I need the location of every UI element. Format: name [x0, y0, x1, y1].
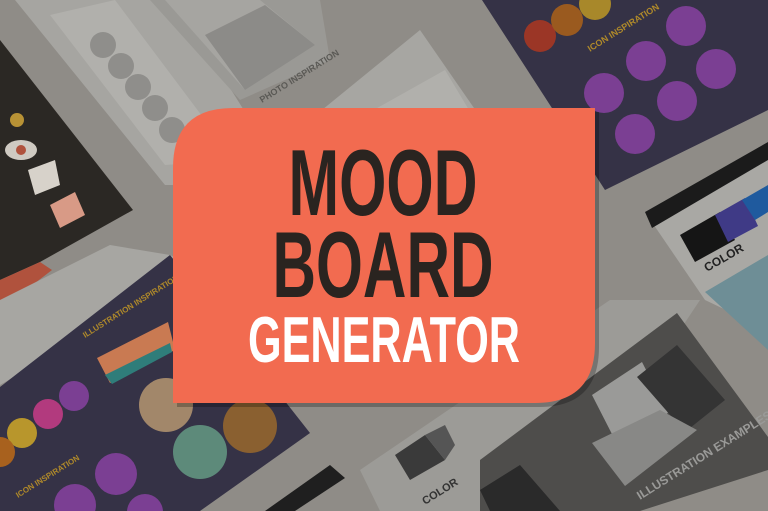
card: color template right: [645, 142, 768, 350]
card: photo placeholder top middle: [150, 0, 330, 100]
title: BOARD: BOARD: [272, 212, 494, 317]
card: navy illustration inspiration bottom-left: ILLUSTRATION INSPIRATION: [81, 273, 181, 340]
card: gray color template bottom-middle: [360, 300, 700, 511]
orange title panel: [173, 108, 599, 407]
card: gray color template bottom-middle: COLOR: [420, 476, 460, 508]
card: illustration examples dark: [480, 313, 768, 511]
card: navy icon inspiration top-right: ICON INSPIRATION: [586, 2, 661, 54]
card: photo inspiration light: PHOTO INSPIRATION: [258, 48, 341, 105]
card: navy icon inspiration top-right: [482, 0, 768, 190]
card: light gray template top-left: [15, 0, 250, 185]
card: navy illustration inspiration bottom-left: ICON INSPIRATION: [14, 453, 81, 500]
card: dark strip bottom: [265, 465, 345, 511]
card: dark illustration left: [0, 40, 133, 310]
title: MOOD: MOOD: [288, 130, 478, 235]
card: color template right: COLOR: [702, 241, 746, 275]
card: photo inspiration light: [230, 30, 510, 200]
card: navy illustration inspiration bottom-left: [0, 245, 310, 511]
subtitle: GENERATOR: GENERATOR: [248, 303, 520, 376]
